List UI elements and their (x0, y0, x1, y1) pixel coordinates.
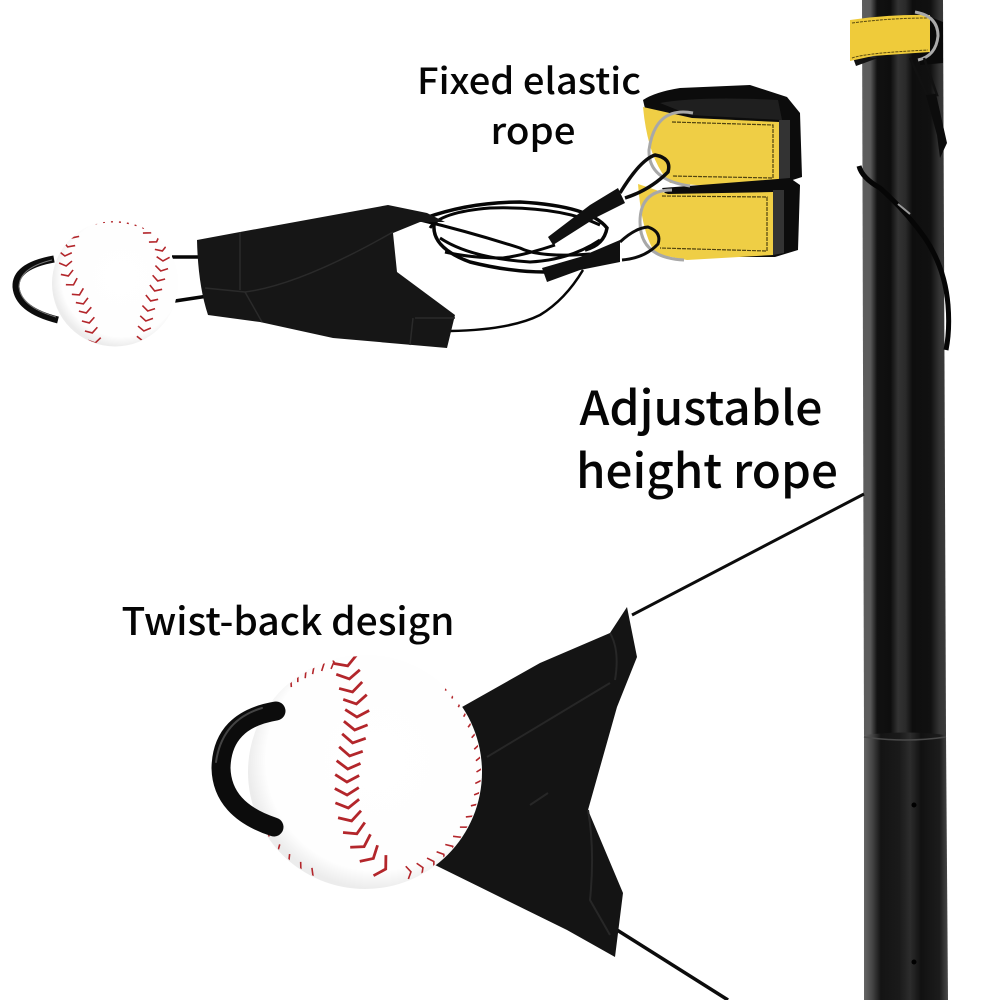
top strap yellow (643, 107, 779, 186)
top strap back (643, 85, 802, 184)
large mesh pouch (435, 607, 637, 957)
D rings (649, 112, 693, 186)
top loop (620, 155, 669, 198)
heading: fixed elastic rope: Fixed elastic (417, 53, 641, 105)
lower strap back (662, 178, 800, 257)
small baseball (52, 220, 178, 350)
heading: adjustable height rope: height rope (576, 433, 838, 502)
top strap band (779, 120, 790, 184)
icon: D-ring handle (216, 708, 276, 827)
heading: fixed elastic rope (417, 53, 641, 155)
pole (862, 0, 948, 1000)
small D-ring handle (16, 259, 58, 320)
heading: fixed elastic rope: rope (490, 103, 576, 155)
lower sleeve (542, 240, 620, 282)
top assembly: cords (172, 202, 607, 331)
icon: wrist straps (542, 85, 802, 282)
lower loop (620, 227, 659, 260)
cord wrapped around pole (859, 166, 949, 350)
lower strap yellow (638, 184, 773, 260)
height rope (617, 494, 864, 1000)
icon: strap on pole (850, 12, 947, 158)
large baseball (248, 653, 483, 889)
lower strap band (773, 190, 784, 255)
heading: adjustable height rope (576, 370, 838, 502)
top strap mesh (660, 99, 782, 120)
top sleeve (548, 188, 625, 245)
small mesh pouch (197, 205, 455, 348)
heading: adjustable height rope: Adjustable (580, 370, 822, 439)
heading: twist-back design: Twist-back design (122, 591, 455, 646)
